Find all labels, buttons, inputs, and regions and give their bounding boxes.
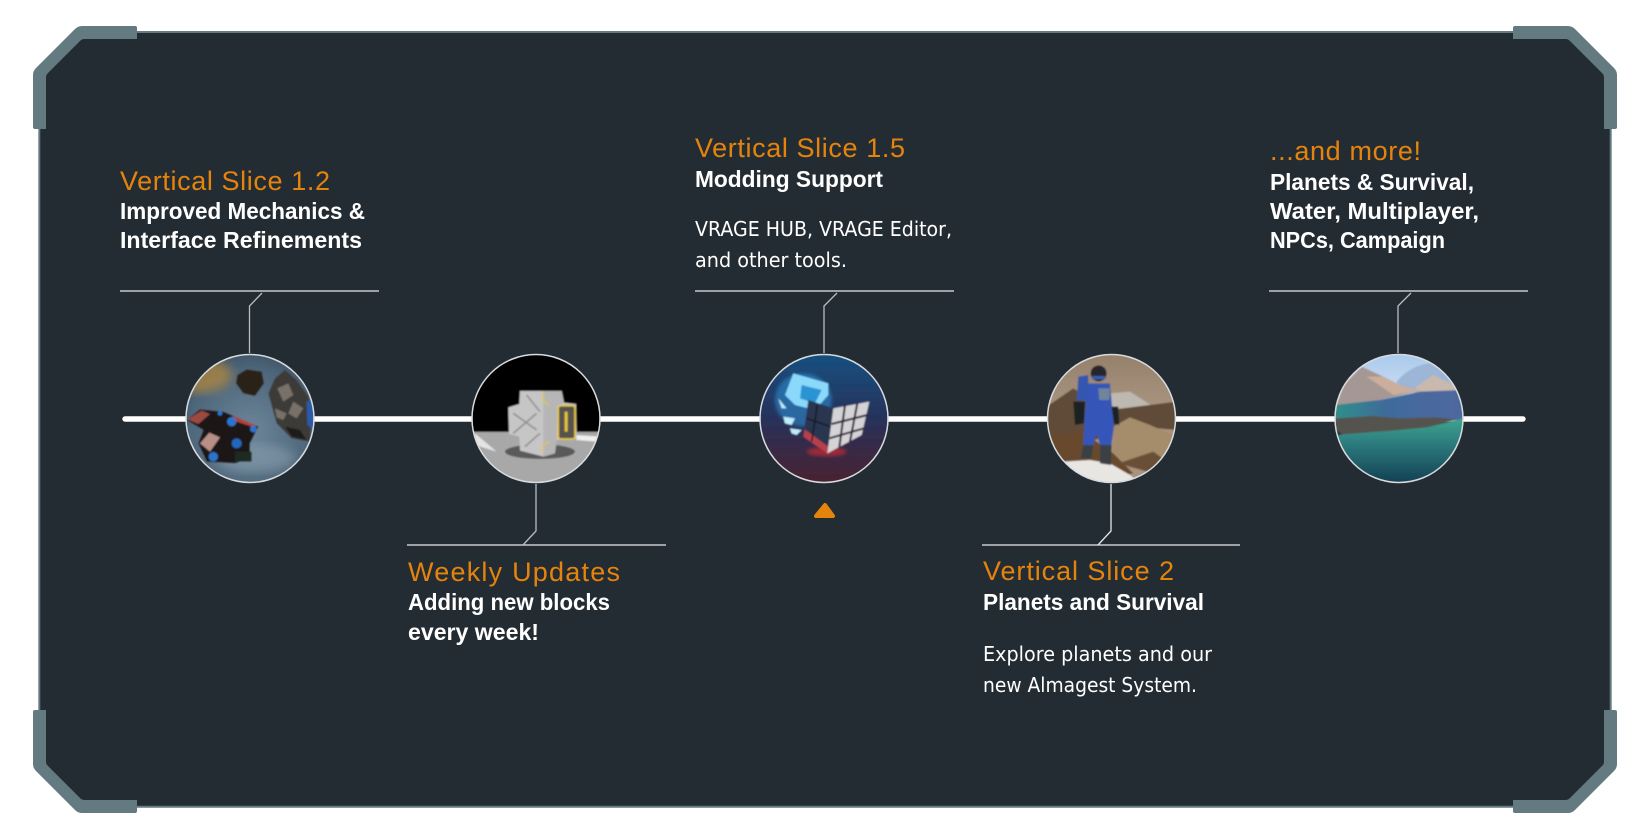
milestone: Vertical Slice 1.5 [695, 133, 954, 516]
milestone: Vertical Slice 2 [982, 354, 1240, 697]
icon ring [472, 354, 600, 482]
heading: Vertical Slice 2 [983, 556, 1174, 586]
subheading: Modding Support [695, 166, 883, 192]
description [695, 217, 952, 272]
subheading [120, 198, 365, 253]
heading: Vertical Slice 1.5 [695, 133, 905, 163]
description [983, 642, 1213, 697]
subheading: Planets and Survival [983, 589, 1204, 615]
icon: dissolving cube [760, 354, 888, 484]
milestone: Weekly Updates [407, 354, 666, 645]
description: Explore planets and our [983, 642, 1213, 666]
heading: Weekly Updates [408, 557, 620, 587]
subheading: NPCs, Campaign [1270, 227, 1445, 253]
corner bracket: bottom left [33, 710, 137, 813]
icon ring [760, 354, 888, 482]
heading: ...and more! [1270, 136, 1421, 166]
subheading [1270, 169, 1479, 253]
icon: armor block [472, 354, 600, 484]
corner bracket: top right [1513, 26, 1617, 129]
icon ring [1335, 354, 1463, 482]
description: VRAGE HUB, VRAGE Editor, [695, 217, 952, 241]
subheading [408, 589, 610, 645]
subheading: Interface Refinements [120, 227, 362, 253]
connector [695, 291, 954, 353]
description: new Almagest System. [983, 673, 1197, 697]
subheading: Improved Mechanics & [120, 198, 365, 224]
icon: ship and asteroids [186, 355, 314, 482]
subheading: Adding new blocks [408, 589, 610, 615]
connector [120, 291, 379, 353]
timeline line [125, 416, 1523, 422]
description: and other tools. [695, 248, 847, 272]
marker: current position triangle [816, 505, 833, 516]
milestone: and more [1269, 136, 1528, 483]
corner bracket: bottom right [1513, 710, 1617, 813]
corner bracket: top left [33, 26, 137, 129]
connector [407, 484, 666, 545]
subheading: every week! [408, 619, 539, 645]
milestone: Vertical Slice 1.2 [120, 166, 379, 484]
heading: Vertical Slice 1.2 [120, 166, 330, 196]
icon: astronaut on planet [1047, 354, 1177, 484]
subheading: Planets & Survival, [1270, 169, 1474, 195]
icon ring [186, 354, 314, 482]
subheading: Water, Multiplayer, [1270, 198, 1479, 224]
connector [1269, 291, 1528, 353]
icon: planet with water [1335, 354, 1463, 483]
icon ring [1048, 354, 1176, 482]
connector [982, 484, 1240, 545]
